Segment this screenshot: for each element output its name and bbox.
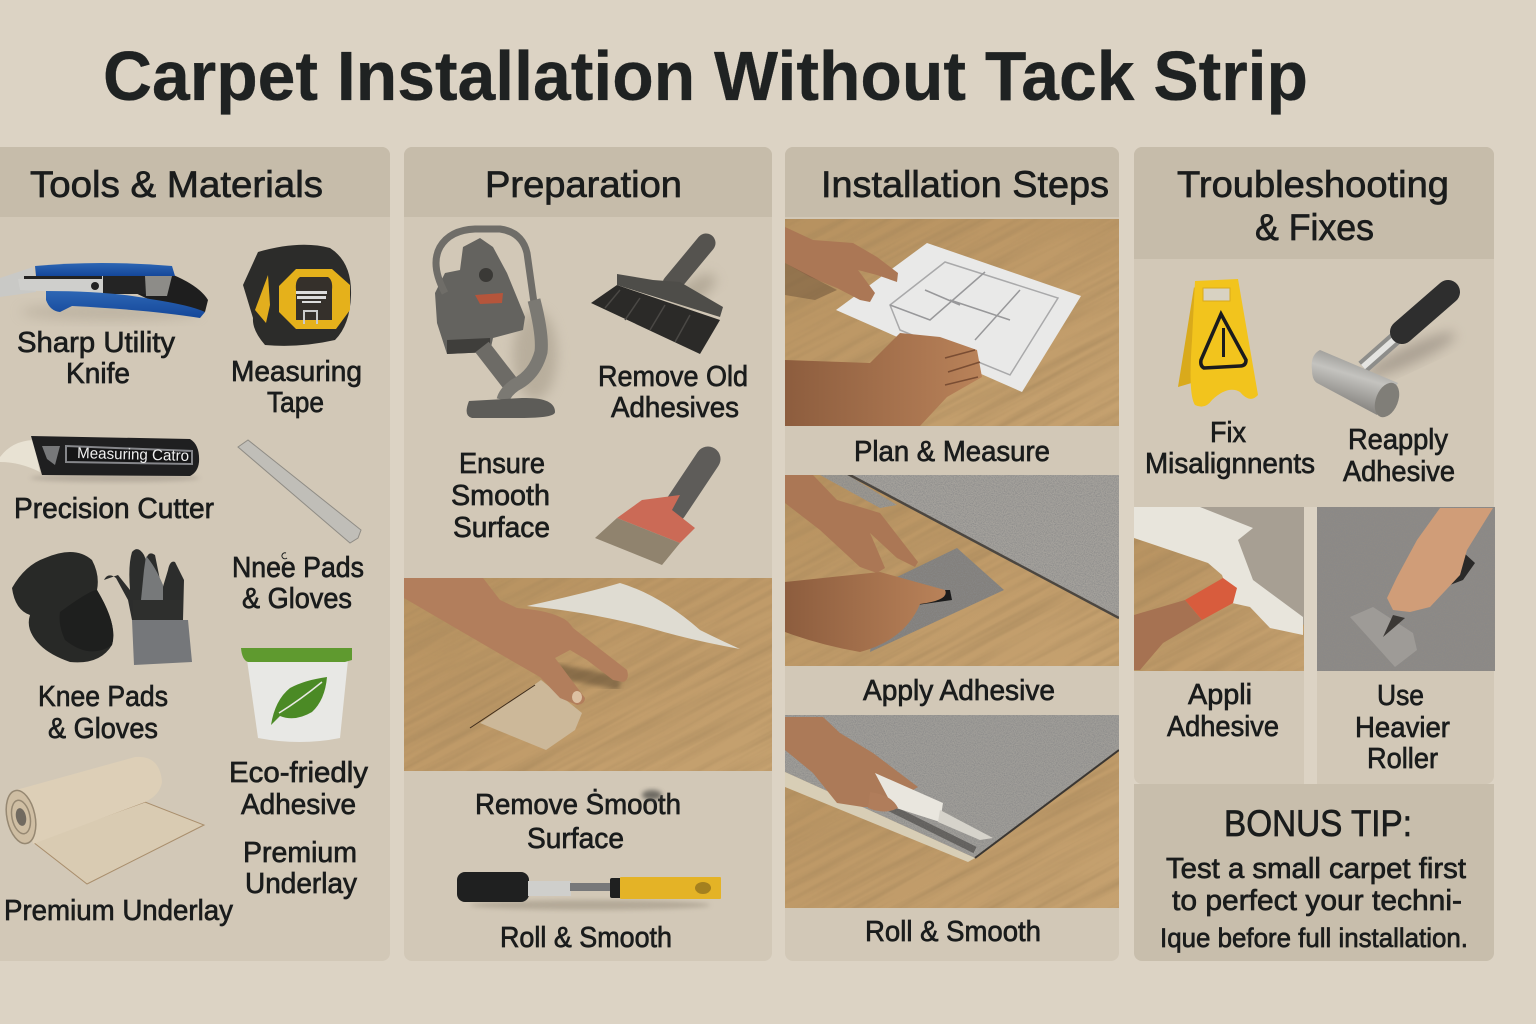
bonus tip body [1160, 853, 1468, 953]
label: remove smooth surface [475, 788, 681, 855]
label: use heavier roller: Use [1377, 680, 1424, 712]
label: knee pads and gloves: Knee Pads [38, 681, 168, 713]
label: eco-friedly adhesive: Eco-friedly [229, 757, 368, 789]
label: measuring tape: Measuring [231, 356, 362, 388]
label: use heavier roller: Roller [1367, 743, 1438, 775]
label: reapply adhesive: Reapply [1348, 424, 1448, 456]
label: knee pads and gloves [38, 681, 168, 745]
label: knee pads and gloves: & Gloves [48, 713, 158, 745]
label: appli adhesive: Appli [1188, 679, 1252, 711]
label: nnee pads and gloves: Nnee Pads [232, 552, 364, 584]
photo: plan and measure [785, 219, 1119, 426]
heading: troubleshooting and fixes: Troubleshooting [1177, 164, 1449, 205]
label: reapply adhesive: Adhesive [1343, 456, 1455, 488]
label: nnee pads and gloves: & Gloves [242, 583, 352, 615]
label: use heavier roller [1355, 680, 1450, 775]
label: remove smooth surface: Remove Ṡmooth [475, 788, 681, 821]
label: ensure smooth surface [451, 448, 550, 544]
bonus tip body: Ique before full installation. [1160, 923, 1468, 953]
label: remove old adhesives: Adhesives [611, 392, 739, 424]
icon: precision cutter: Measuring Catro [77, 445, 189, 465]
label: premium underlay right [243, 837, 357, 900]
heading: installation steps: Installation Steps [821, 164, 1109, 205]
heading: tools and materials: Tools & Materials [30, 164, 323, 205]
label: fix misalignnents: Fix [1210, 417, 1246, 449]
label: premium underlay bottom: Premium Underlay [4, 895, 233, 927]
photo: roll and smooth [785, 715, 1119, 908]
label: eco-friedly adhesive [229, 757, 368, 821]
icon: roller tool [457, 872, 721, 910]
icon: precision cutter [0, 436, 200, 482]
label: appli adhesive: Adhesive [1167, 711, 1279, 743]
icon: scrub brush [591, 243, 723, 354]
label: plan and measure: Plan & Measure [854, 436, 1050, 468]
label: remove smooth surface: Surface [527, 823, 624, 855]
label: measuring tape: Tape [267, 387, 324, 419]
label: ensure smooth surface: Ensure [459, 448, 545, 480]
label: roll and smooth: Roll & Smooth [500, 922, 672, 954]
label: ensure smooth surface: Surface [453, 512, 550, 544]
label: appli adhesive [1167, 679, 1279, 743]
icon: knee pads and gloves [12, 549, 192, 665]
photo: use heavier roller [1317, 507, 1495, 671]
label: eco-friedly adhesive: Adhesive [241, 789, 356, 821]
icon: vacuum cleaner [435, 229, 557, 418]
panel: preparation [404, 147, 772, 961]
icon: utility knife [0, 263, 208, 320]
label: remove old adhesives: Remove Old [598, 361, 748, 393]
label: premium underlay right: Premium [243, 837, 357, 869]
label: reapply adhesive [1343, 424, 1455, 488]
label: apply adhesive: Apply Adhesive [863, 675, 1055, 707]
label: nnee pads and gloves [232, 552, 364, 615]
panel: installation steps [785, 147, 1119, 961]
label: use heavier roller: Heavier [1355, 712, 1450, 744]
bonus tip body: Test a small carpet first [1166, 853, 1466, 885]
icon: underlay roll [2, 757, 204, 884]
label: precision cutter: Precision Cutter [14, 493, 214, 525]
icon: yellow caution sign [1178, 279, 1258, 407]
icon: metal bar [238, 440, 361, 543]
label: ensure smooth surface: Smooth [451, 480, 550, 512]
photo: apply adhesive [785, 474, 1119, 666]
label: sharp utility knife [17, 327, 176, 390]
label: measuring tape [231, 356, 362, 419]
heading: preparation: Preparation [485, 164, 682, 205]
photo: spreading adhesive on wood floor [404, 578, 772, 771]
callout: bonus tip [1134, 784, 1494, 961]
panel: troubleshooting and fixes [1134, 147, 1495, 784]
panel: tools and materials [0, 147, 390, 961]
icon: eco adhesive bucket [241, 648, 352, 742]
label: fix misalignnents [1145, 417, 1315, 480]
column gap [1304, 507, 1317, 784]
label: sharp utility knife: Knife [66, 358, 130, 390]
heading: troubleshooting and fixes [1177, 164, 1449, 248]
heading: troubleshooting and fixes: & Fixes [1255, 207, 1374, 248]
title: Carpet Installation Without Tack Strip [103, 37, 1308, 115]
label: roll and smooth: Roll & Smooth [865, 916, 1041, 948]
icon: floor scraper [595, 459, 708, 565]
label: fix misalignnents: Misalignnents [1145, 448, 1315, 480]
icon: hand roller [1312, 292, 1459, 421]
label: sharp utility knife: Sharp Utility [17, 327, 176, 359]
photo: apply adhesive on floor [1134, 507, 1304, 671]
bonus tip heading: BONUS TIP: [1224, 803, 1412, 844]
label: remove old adhesives [598, 361, 748, 424]
bonus tip body: to perfect your techni- [1172, 885, 1462, 917]
icon: measuring tape [243, 245, 351, 346]
label: premium underlay right: Underlay [245, 868, 357, 900]
